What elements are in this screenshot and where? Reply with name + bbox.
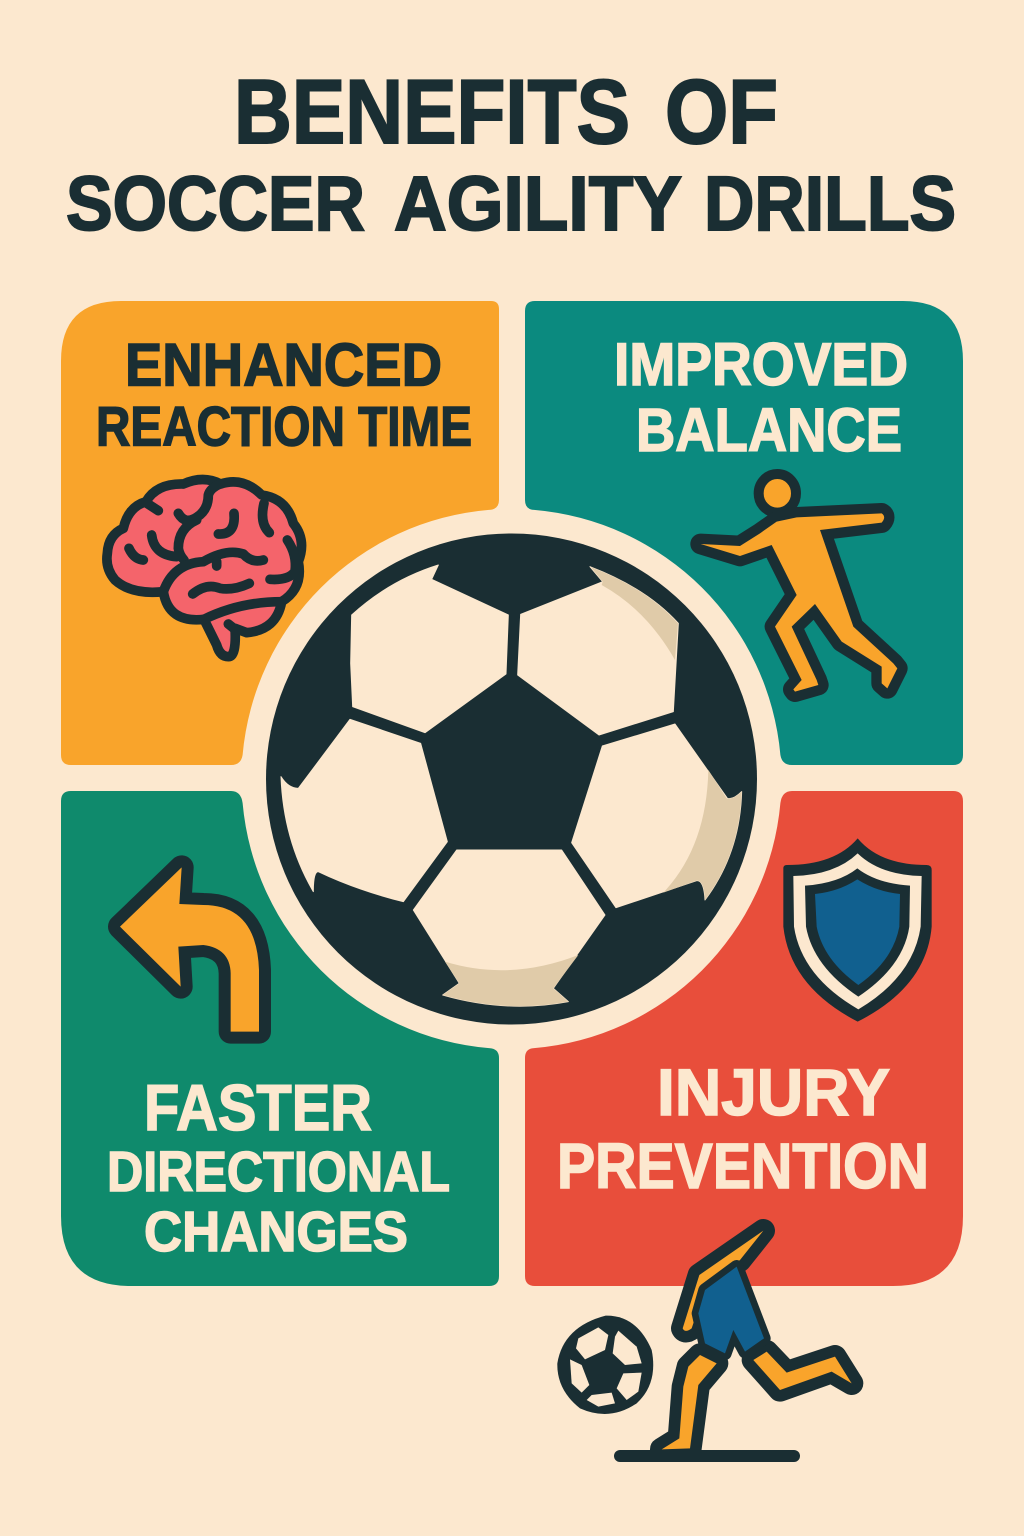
icon: player kicking ball [557, 1231, 852, 1456]
small soccer ball [557, 1316, 653, 1414]
title: DRILLS [704, 161, 956, 247]
soccer ball [266, 534, 757, 1024]
heading: improved balance [614, 331, 908, 464]
title: OF [665, 62, 778, 163]
panel: faster directional changes [61, 791, 499, 1286]
panel: injury prevention [525, 791, 963, 1286]
heading: injury prevention [557, 1055, 929, 1202]
title: SOCCER [66, 161, 365, 247]
icon: turn arrow [120, 867, 259, 1032]
heading: improved balance: IMPROVED [614, 331, 908, 398]
title [66, 62, 956, 247]
heading: injury prevention: PREVENTION [557, 1130, 929, 1202]
heading: improved balance: BALANCE [636, 396, 902, 464]
title: BENEFITS [234, 62, 630, 163]
icon: balancing figure [701, 474, 897, 692]
panel: improved balance [525, 301, 963, 765]
icon: brain [107, 479, 302, 657]
heading: enhanced reaction time [96, 332, 472, 458]
heading: enhanced reaction time: ENHANCED [125, 332, 442, 398]
heading: faster directional changes: FASTER [144, 1071, 372, 1144]
heading: faster directional changes: DIRECTIONAL [107, 1140, 450, 1204]
icon: shield [783, 838, 932, 1022]
panel: enhanced reaction time [61, 301, 499, 765]
heading: faster directional changes [107, 1071, 450, 1264]
heading: enhanced reaction time: REACTION TIME [96, 394, 472, 458]
title: AGILITY [394, 161, 682, 247]
heading: injury prevention: INJURY [657, 1055, 890, 1129]
player figure [662, 1231, 852, 1449]
heading: faster directional changes: CHANGES [144, 1200, 408, 1264]
